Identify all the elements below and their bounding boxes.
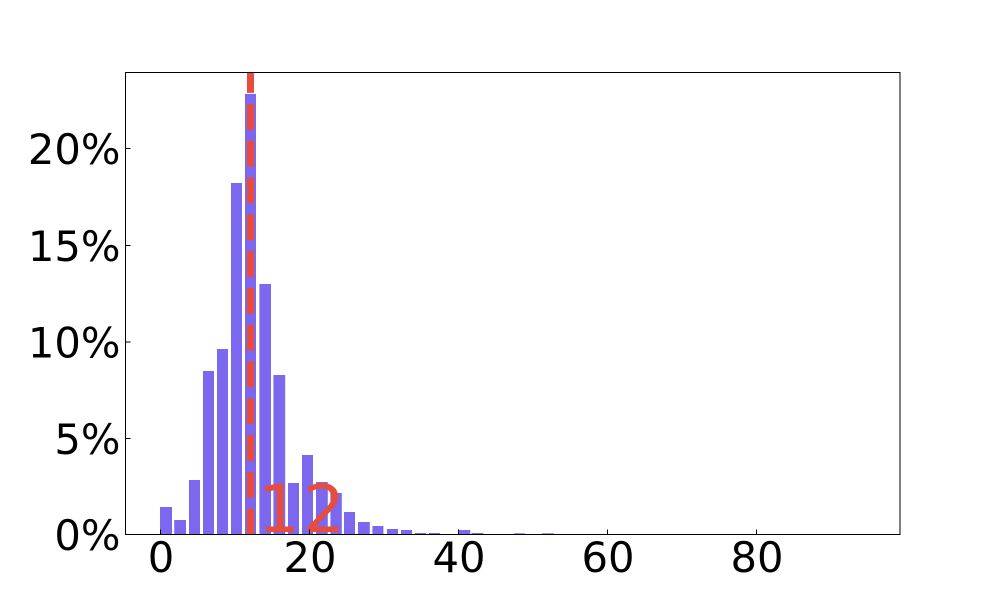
histogram bars — [160, 94, 554, 534]
y axis labels — [28, 125, 120, 560]
plot frame — [126, 72, 900, 534]
y axis ticks — [126, 148, 130, 534]
x axis labels: 40 — [432, 533, 486, 582]
x axis labels: 60 — [581, 533, 635, 582]
x axis ticks — [160, 530, 756, 534]
y axis labels: 5% — [54, 415, 120, 464]
x axis labels: 80 — [730, 533, 784, 582]
y axis labels: 10% — [28, 318, 120, 368]
y axis labels: 15% — [28, 222, 120, 271]
y axis labels: 0% — [54, 511, 120, 560]
y axis labels: 20% — [28, 125, 120, 174]
histogram chart — [30, 72, 900, 572]
x axis labels: 0 — [148, 533, 174, 582]
x axis labels — [148, 533, 784, 582]
median label: 12 — [258, 471, 348, 548]
median dashed line — [247, 60, 254, 534]
x axis labels: 20 — [283, 533, 337, 582]
